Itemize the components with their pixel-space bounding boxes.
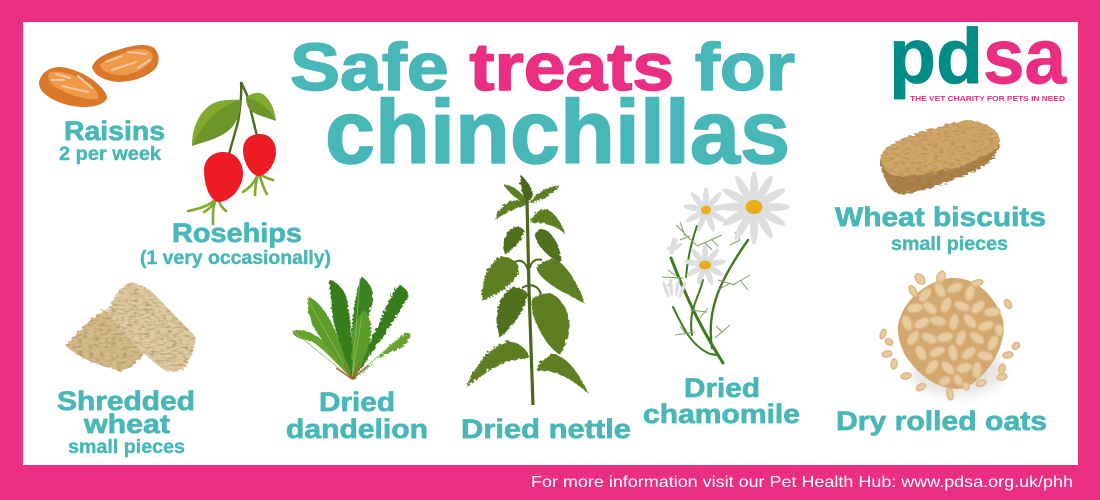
label: rosehips: Rosehips: [172, 218, 302, 248]
label: dried dandelion: dandelion: [286, 414, 428, 444]
label: wheat biscuits: small pieces: [891, 234, 1008, 255]
label: rosehips: [140, 218, 331, 269]
label: shredded wheat: [57, 386, 195, 458]
title: [290, 30, 795, 183]
icon: shredded wheat: [66, 283, 195, 372]
label: dried chamomile: [643, 373, 800, 429]
label: raisins: 2 per week: [59, 144, 161, 165]
icon: raisins: [39, 45, 159, 107]
label: shredded wheat: wheat: [83, 409, 170, 439]
icon: dandelion: [291, 275, 409, 379]
label: wheat biscuits: [835, 202, 1046, 255]
icon: chamomile: [661, 171, 790, 363]
logo: pdsa: [889, 12, 1067, 103]
label: dried chamomile: Dried: [684, 373, 760, 403]
label: dried dandelion: Dried: [319, 387, 395, 417]
logo: pdsa: sa: [983, 12, 1067, 100]
title: chinchillas: [325, 83, 790, 183]
label: wheat biscuits: Wheat biscuits: [835, 202, 1046, 232]
logo: pdsa: pd: [889, 12, 983, 100]
icon: wheat biscuit: [880, 121, 1000, 194]
icon: rosehips: [188, 82, 276, 224]
logo: pdsa: THE VET CHARITY FOR PETS IN NEED: [910, 94, 1066, 103]
label: dried dandelion: [286, 387, 428, 444]
footer text: For more information visit our Pet Health Hub: www.pdsa.org.uk/phh: [531, 474, 1073, 491]
icon: nettle: [465, 173, 587, 405]
label: shredded wheat: small pieces: [68, 437, 185, 458]
label: dry rolled oats: Dry rolled oats: [836, 406, 1047, 436]
label: dried chamomile: chamomile: [643, 399, 800, 429]
label: rosehips: (1 very occasionally): [140, 248, 331, 269]
icon: rolled oats: [879, 270, 1021, 400]
label: shredded wheat: Shredded: [57, 386, 195, 416]
label: dried nettle: Dried nettle: [461, 414, 631, 444]
label: raisins: Raisins: [64, 116, 165, 146]
title: Safe treats for: [290, 30, 795, 105]
label: raisins: [59, 116, 165, 165]
